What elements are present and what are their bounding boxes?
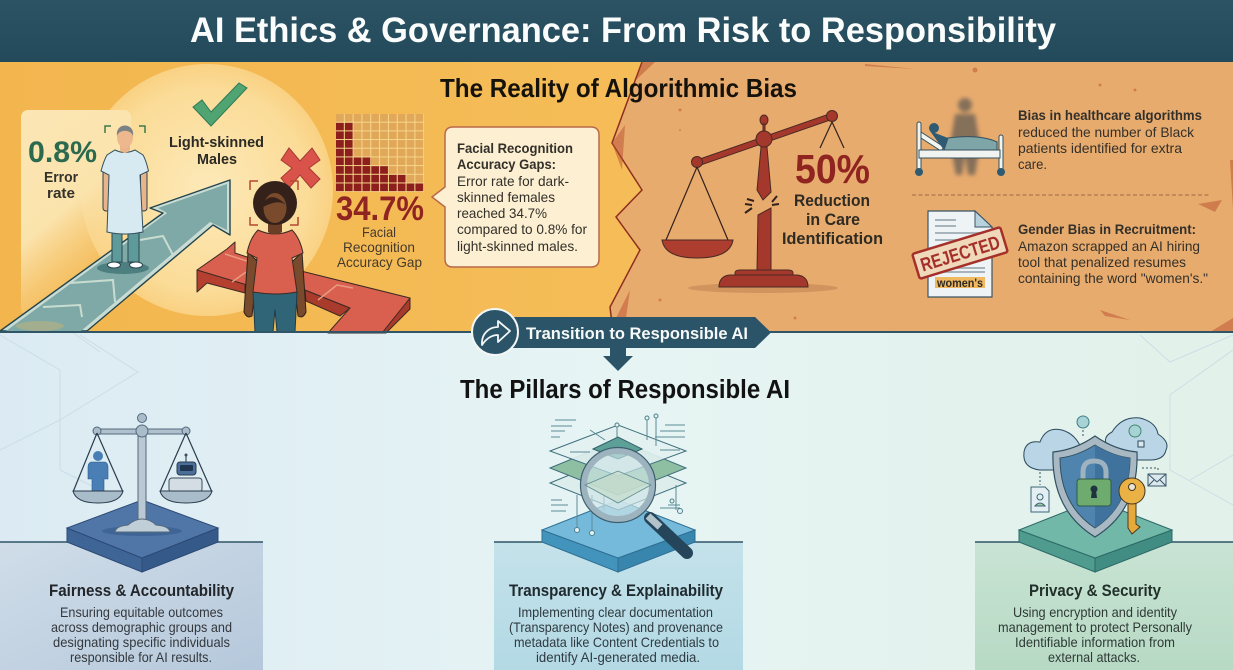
text: gender bias in recruitment: tool that penalized resumes [1018, 254, 1186, 270]
icon: broken scale [662, 110, 844, 293]
left side background [0, 62, 660, 332]
text: healthcare bias: care. [1018, 156, 1047, 172]
transition banner [472, 309, 771, 371]
description: Using encryption and identity [1013, 604, 1177, 620]
description: Identifiable information from [1015, 634, 1175, 650]
stat: 34.7% facial recognition accuracy gap: Facial [362, 224, 396, 240]
panel: transparency and explainability [494, 414, 743, 670]
icon: rejected resume [912, 211, 1008, 297]
panel: reality of algorithmic bias [0, 62, 1233, 332]
callout: facial recognition accuracy gaps: skinned females [457, 189, 555, 205]
platform [1019, 500, 1172, 572]
zigzag edge [610, 62, 642, 332]
red downward arrow [197, 242, 410, 333]
green upward arrow [0, 180, 230, 331]
icon: rejected resume: REJECTED [918, 232, 1003, 276]
description: management to protect Personally [998, 619, 1192, 635]
transition banner: Transition to Responsible AI [526, 324, 748, 343]
description [509, 604, 723, 665]
description: Ensuring equitable outcomes [60, 604, 223, 620]
decorative network lines [0, 332, 1233, 505]
callout: facial recognition accuracy gaps: light-skinned males. [457, 238, 578, 254]
stat: 50% reduction in care identification: Identification [782, 230, 883, 248]
callout: facial recognition accuracy gaps: compared to 0.8% for [457, 221, 587, 237]
text: gender bias in recruitment: Amazon scrapped an AI hiring [1018, 238, 1200, 254]
label: light-skinned males [169, 135, 264, 168]
callout: facial recognition accuracy gaps: reached 34.7% [457, 205, 547, 221]
text: gender bias in recruitment: Gender Bias in Recruitment: [1018, 221, 1196, 237]
icon: balance scale human and robot [73, 414, 212, 536]
description: (Transparency Notes) and provenance [509, 619, 723, 635]
heading: Privacy & Security [1029, 581, 1161, 600]
figure: dark-skinned female [244, 181, 306, 332]
icon: green check [193, 83, 247, 126]
stat: 0.8% error rate: rate [47, 186, 75, 202]
stat: 34.7% facial recognition accuracy gap: 34.7% [336, 190, 424, 228]
waffle chart: accuracy gap [336, 114, 424, 192]
description: designating specific individuals [53, 634, 230, 650]
icon: hospital bed with faded patient [915, 98, 1005, 176]
section heading: reality of algorithmic bias: The Reality of Algorithmic Bias [440, 73, 797, 103]
stat: 34.7% facial recognition accuracy gap: Recognition [343, 239, 415, 255]
text: healthcare bias: reduced the number of Black [1018, 124, 1195, 140]
title: AI Ethics & Governance: From Risk to Responsibility [190, 11, 1057, 50]
stat: 0.8% error rate: Error [44, 170, 78, 186]
icon: circuit layers under magnifier [550, 414, 687, 553]
stat: 0.8% error rate [28, 136, 97, 202]
icon: red x [281, 148, 320, 188]
description: responsible for AI results. [70, 649, 212, 665]
description [998, 604, 1192, 665]
grunge marks [612, 62, 1233, 332]
header bar [0, 0, 1233, 62]
text: gender bias in recruitment [1018, 221, 1208, 286]
text: healthcare bias: Bias in healthcare algorithms [1018, 107, 1202, 123]
icon: rejected resume: women's [936, 276, 983, 290]
section heading: pillars of responsible AI: The Pillars of Responsible AI [460, 376, 790, 404]
description: external attacks. [1048, 649, 1140, 665]
figure: light-skinned male [97, 126, 149, 274]
icon: clouds shield lock key [1024, 416, 1167, 537]
stat: 50% reduction in care identification [782, 146, 883, 248]
description: metadata like Content Credentials to [514, 634, 719, 650]
description [51, 604, 232, 665]
platform [542, 500, 695, 572]
panel: fairness and accountability [0, 414, 263, 670]
text: healthcare bias: patients identified for extra [1018, 140, 1182, 156]
stat: 0.8% error rate: 0.8% [28, 136, 97, 169]
text: gender bias in recruitment: containing the word "women's." [1018, 270, 1208, 286]
stat: 34.7% facial recognition accuracy gap [336, 190, 424, 270]
panel: privacy and security [975, 416, 1233, 670]
light stat box [21, 110, 131, 315]
stat: 50% reduction in care identification: in Care [806, 211, 860, 229]
description: identify AI-generated media. [536, 649, 700, 665]
heading: Transparency & Explainability [509, 581, 723, 600]
description: Implementing clear documentation [518, 604, 713, 620]
callout: facial recognition accuracy gaps [432, 127, 599, 267]
stat: 34.7% facial recognition accuracy gap: Accuracy Gap [337, 254, 422, 270]
stat: 50% reduction in care identification: Reduction [794, 192, 870, 210]
label: light-skinned males: Males [197, 152, 237, 168]
text: healthcare bias [1018, 107, 1202, 172]
right side background [610, 62, 1233, 332]
platform [67, 500, 218, 572]
glow behind figures [81, 64, 333, 316]
callout: facial recognition accuracy gaps: Accuracy Gaps: [457, 156, 556, 172]
callout: facial recognition accuracy gaps: Facial Recognition [457, 140, 573, 156]
stat: 50% reduction in care identification: 50% [795, 146, 870, 192]
description: across demographic groups and [51, 619, 232, 635]
page background: lower section [0, 332, 1233, 670]
callout: facial recognition accuracy gaps: Error rate for dark- [457, 173, 569, 189]
heading: Fairness & Accountability [49, 581, 234, 600]
label: light-skinned males: Light-skinned [169, 135, 264, 151]
